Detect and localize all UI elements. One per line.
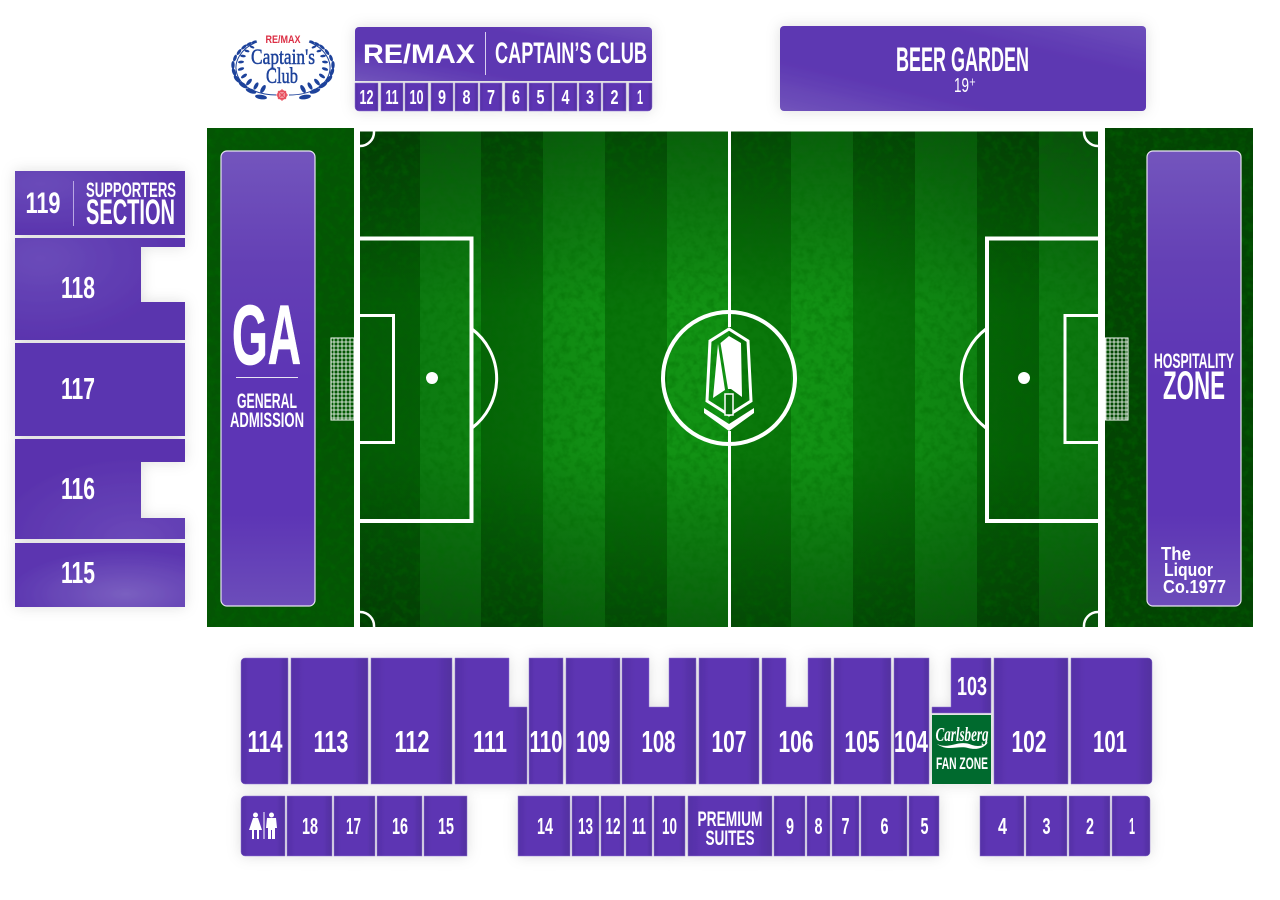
suites row centre: 14 to 5 with premium suites: 9 [786, 813, 794, 839]
pitch markings [359, 132, 1099, 627]
lower stand labels: 105 [844, 724, 880, 759]
seat sections 12 to 1: 9 [438, 87, 446, 109]
suites row left: washrooms and 18 to 15 [241, 796, 467, 856]
suites row centre: 14 to 5 with premium suites: 13 [578, 813, 593, 839]
seat sections 12 to 1: 7 [487, 87, 495, 109]
logo: The Liquor Co. 1977 [1161, 544, 1226, 597]
section 119 supporters [15, 171, 185, 235]
suites row right: 4 to 1: 1 [1129, 813, 1135, 839]
icon: washrooms [249, 812, 277, 839]
lower stand labels: 113 [314, 724, 348, 759]
panel: General Admission [221, 151, 315, 606]
suites row centre: 14 to 5 with premium suites: 14 [537, 813, 553, 839]
section 119 supporters: SUPPORTERS [86, 179, 176, 202]
panel: General Admission: GENERAL [237, 390, 297, 413]
seat sections 12 to 1: 5 [536, 87, 544, 109]
lower stand labels: 114 [248, 724, 283, 759]
logo: The Liquor Co. 1977: The [1161, 544, 1191, 564]
lower stand labels: 108 [642, 724, 676, 759]
panel: Beer Garden [780, 26, 1146, 111]
centre crest [704, 329, 754, 431]
logo: RE/MAX Captain's Club: RE/MAX [266, 34, 301, 46]
lower stand labels: 104 [894, 724, 928, 759]
suites row left: washrooms and 18 to 15: 17 [346, 813, 361, 839]
logo: The Liquor Co. 1977: Co.1977 [1163, 577, 1226, 597]
suites row right: 4 to 1: 4 [998, 813, 1007, 839]
seat sections 12 to 1: 10 [410, 87, 424, 109]
Carlsberg fan zone: Carlsberg [936, 724, 988, 746]
section 118: 118 [61, 270, 95, 305]
Carlsberg fan zone [932, 715, 991, 784]
premium suites label: PREMIUM [698, 808, 762, 831]
section 115: 115 [61, 555, 95, 590]
suites row centre: 14 to 5 with premium suites: 10 [662, 813, 677, 839]
suites row centre: 14 to 5 with premium suites: 11 [632, 813, 646, 839]
left goal net [331, 338, 354, 420]
suites row left: washrooms and 18 to 15: 15 [438, 813, 454, 839]
seat sections 12 to 1: 11 [386, 87, 398, 109]
lower stand labels: 101 [1093, 724, 1127, 759]
right goal net [1105, 338, 1128, 420]
pitch [207, 128, 1253, 627]
RE/MAX wordmark: RE/MAX [363, 39, 475, 69]
panel: General Admission: GA [232, 288, 301, 382]
right end zone turf [1105, 128, 1253, 627]
Carlsberg fan zone: FAN ZONE [936, 754, 988, 773]
lower stand labels: 109 [576, 724, 610, 759]
suites row centre: 14 to 5 with premium suites: 6 [880, 813, 888, 839]
seat sections 12 to 1: 8 [462, 87, 470, 109]
section 119 supporters: SECTION [86, 193, 175, 232]
premium suites label [698, 808, 762, 850]
panel: Hospitality Zone [1147, 151, 1241, 606]
lower stand labels: 103 [957, 671, 987, 701]
section 117: 117 [61, 371, 95, 406]
left stand sections [15, 171, 185, 607]
lower stand labels: 110 [530, 724, 562, 759]
premium suites label: SUITES [706, 827, 754, 850]
suites row centre: 14 to 5 with premium suites: 12 [606, 813, 620, 839]
left end zone turf [207, 128, 354, 627]
seat sections 12 to 1: 6 [512, 87, 520, 109]
lower stand sections 114 to 101 [241, 658, 1152, 784]
suites row left: washrooms and 18 to 15: 18 [302, 813, 318, 839]
panel: Hospitality Zone: ZONE [1163, 364, 1225, 408]
seat sections 12 to 1 [355, 83, 652, 111]
lower stand labels: 107 [712, 724, 746, 759]
lower stand labels: 102 [1012, 724, 1046, 759]
seat sections 12 to 1: 3 [586, 87, 594, 109]
section 118 [15, 238, 185, 340]
seat sections 12 to 1: 12 [360, 87, 374, 109]
laurel: right [289, 40, 335, 100]
suites row right: 4 to 1: 3 [1042, 813, 1050, 839]
pitch stripes [360, 132, 1098, 627]
Captain's Club heading: CAPTAIN’S CLUB [495, 37, 647, 70]
panel: General Admission: ADMISSION [230, 409, 304, 432]
suites row centre: 14 to 5 with premium suites: 5 [920, 813, 929, 839]
logo: RE/MAX Captain's Club [231, 34, 335, 101]
lower stand labels: 106 [778, 724, 814, 759]
seat sections 12 to 1: 1 [637, 87, 643, 109]
panel: RE/MAX Captain's Club [355, 27, 652, 111]
lower stand labels: 111 [473, 724, 507, 759]
suites row centre: 14 to 5 with premium suites [518, 796, 939, 856]
seat sections 12 to 1: 2 [610, 87, 618, 109]
lower stand labels [248, 671, 1127, 759]
panel: Beer Garden: 19⁺ [954, 75, 976, 97]
section 119 supporters: 119 [26, 187, 60, 220]
section 117 [15, 343, 185, 436]
section 116: 116 [61, 471, 95, 506]
section 116 [15, 439, 185, 539]
suites row centre: 14 to 5 with premium suites: 8 [814, 813, 823, 839]
suites row centre: 14 to 5 with premium suites: 7 [842, 813, 850, 839]
lower stand labels: 112 [394, 724, 430, 759]
seat sections 12 to 1: 4 [562, 87, 570, 109]
suites row right: 4 to 1: 2 [1086, 813, 1094, 839]
logo: RE/MAX Captain's Club: Captain's [251, 44, 315, 69]
laurel: left [231, 40, 277, 100]
suites row left: washrooms and 18 to 15: 16 [392, 813, 408, 839]
section 115 [15, 543, 185, 607]
logo: RE/MAX Captain's Club: Club [266, 63, 298, 88]
panel: Beer Garden: BEER GARDEN [896, 41, 1029, 79]
logo: The Liquor Co. 1977: Liquor [1164, 560, 1213, 580]
suites row right: 4 to 1 [980, 796, 1150, 856]
